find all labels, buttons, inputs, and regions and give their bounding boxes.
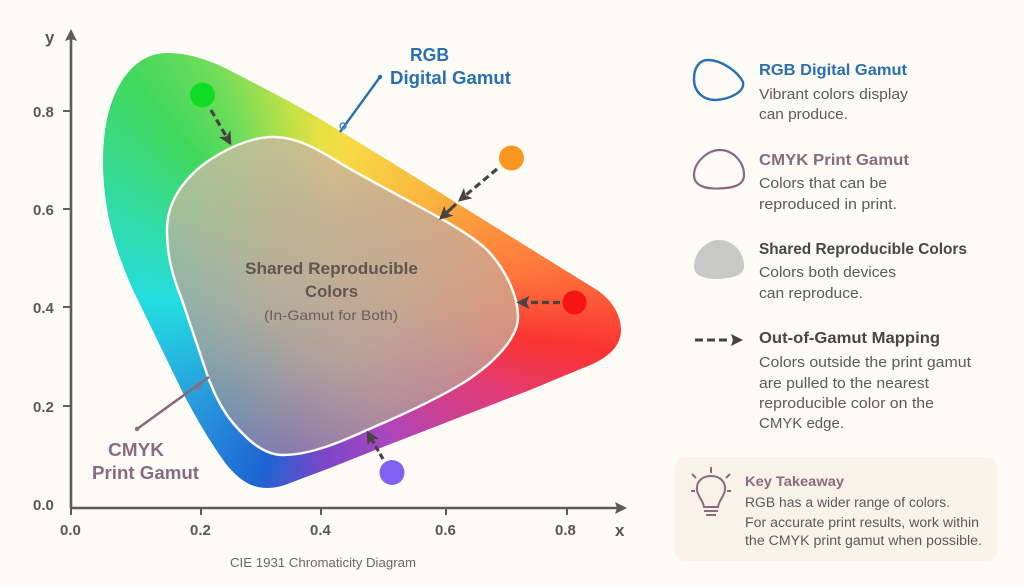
- center label: Shared Reproducible: [245, 259, 418, 278]
- RGB callout: [340, 45, 511, 132]
- legend: mapping: Colors outside the print gamut: [759, 355, 971, 371]
- center label: [245, 259, 418, 323]
- legend: CMYK: reproduced in print.: [759, 197, 897, 213]
- legend: CMYK: [694, 150, 910, 213]
- RGB callout: Digital Gamut: [390, 68, 511, 88]
- key takeaway panel: RGB has a wider range of colors.: [745, 495, 950, 510]
- legend: shared: Colors both devices: [759, 265, 896, 281]
- legend: mapping: reproducible color on the: [759, 396, 934, 412]
- legend: RGB: [694, 60, 909, 123]
- CMYK callout: [92, 377, 209, 483]
- key takeaway panel: For accurate print results, work within: [745, 515, 979, 530]
- icon: shared swatch: [694, 240, 744, 279]
- axis labels: 0.4: [33, 300, 55, 317]
- axis labels: 0.4: [310, 522, 332, 539]
- icon: dashed arrow: [695, 334, 743, 346]
- purple out-of-gamut point: [368, 433, 404, 485]
- legend: mapping: Out-of-Gamut Mapping: [759, 330, 940, 347]
- icon: light bulb: [691, 467, 731, 515]
- axis labels: 0.0: [60, 522, 81, 539]
- red out-of-gamut point: [519, 290, 586, 314]
- legend: CMYK: CMYK Print Gamut: [759, 152, 910, 169]
- legend: CMYK: Colors that can be: [759, 176, 887, 192]
- axis labels: 0.2: [190, 522, 211, 539]
- caption: CIE 1931 Chromaticity Diagram: [230, 556, 416, 570]
- legend: mapping: are pulled to the nearest: [759, 376, 929, 392]
- center label: Colors: [305, 282, 358, 301]
- legend: RGB: Vibrant colors display: [759, 87, 909, 103]
- key takeaway panel: [675, 457, 997, 561]
- key takeaway panel: the CMYK print gamut when possible.: [745, 533, 982, 548]
- axis labels: 0.8: [555, 522, 576, 539]
- icon: CMYK outline: [694, 150, 744, 189]
- axis labels: 0.6: [435, 522, 456, 539]
- legend: shared: [694, 240, 967, 302]
- axis labels: x: [615, 521, 625, 540]
- legend: mapping: [695, 330, 971, 432]
- axis labels: 0.0: [33, 497, 54, 514]
- CMYK gamut outline: [167, 137, 518, 455]
- CMYK callout: CMYK: [108, 440, 164, 460]
- icon: RGB outline: [694, 60, 743, 100]
- axis labels: [33, 28, 625, 540]
- axis labels: y: [45, 28, 55, 47]
- CMYK gamut shared colour area: [168, 138, 517, 454]
- legend: RGB: can produce.: [759, 107, 848, 123]
- orange out-of-gamut point: [441, 146, 524, 218]
- legend: shared: Shared Reproducible Colors: [759, 241, 967, 258]
- key takeaway panel: Key Takeaway: [745, 473, 844, 489]
- axis labels: 0.6: [33, 202, 54, 219]
- axis labels: 0.2: [33, 399, 54, 416]
- legend: shared: can reproduce.: [759, 286, 863, 302]
- legend: RGB: RGB Digital Gamut: [759, 62, 908, 79]
- axes: [63, 29, 627, 515]
- green out-of-gamut point: [190, 82, 230, 143]
- RGB callout: RGB: [410, 45, 449, 65]
- axis labels: 0.8: [33, 104, 54, 121]
- RGB gamut colour field: [103, 53, 621, 488]
- legend: mapping: CMYK edge.: [759, 416, 844, 432]
- center label: (In-Gamut for Both): [264, 307, 398, 323]
- CMYK callout: Print Gamut: [92, 463, 199, 483]
